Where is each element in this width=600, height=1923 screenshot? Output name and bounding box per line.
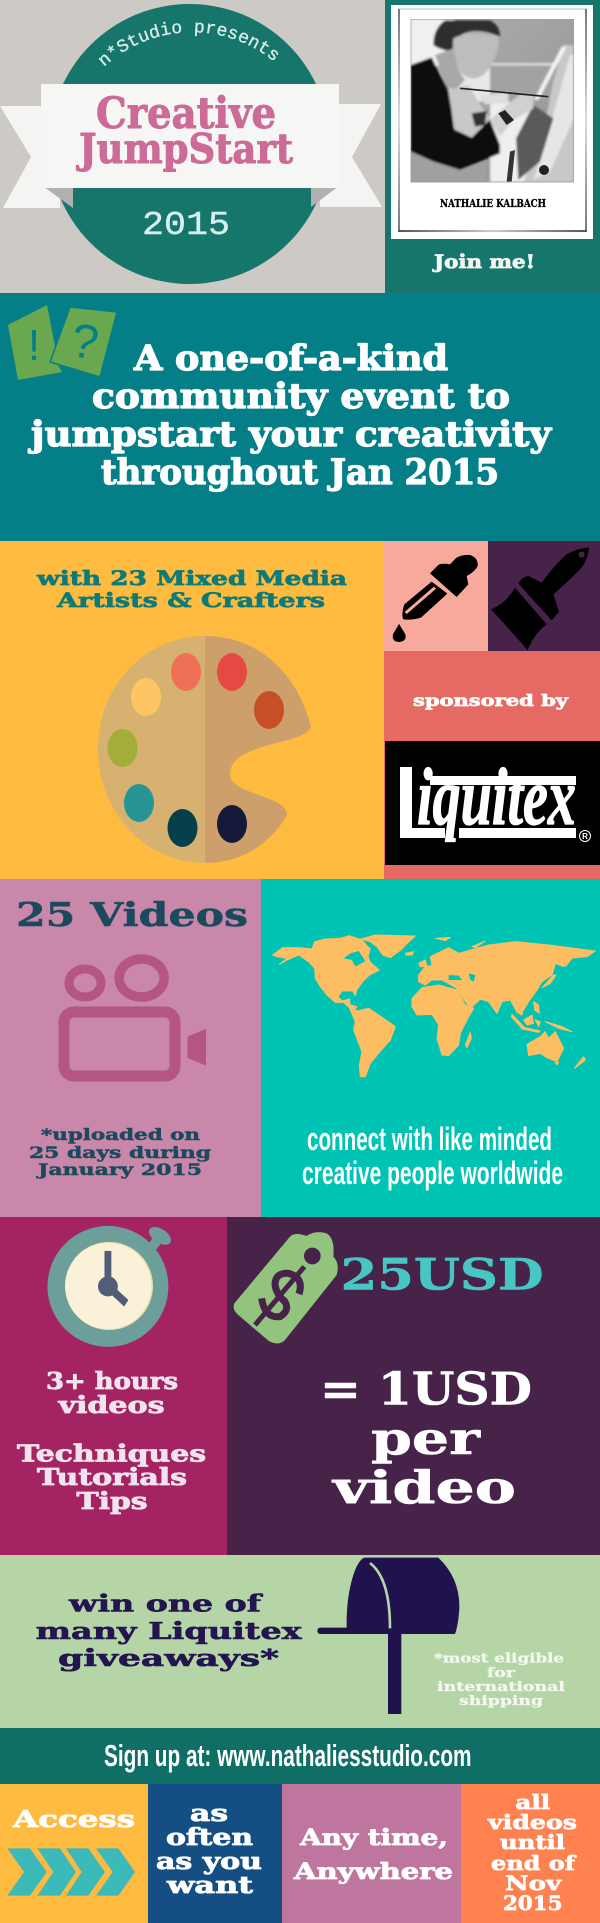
- text: as often as you want: as: [190, 1800, 228, 1827]
- icon: paint palette: [98, 636, 311, 863]
- note: upload schedule: *uploaded on: [41, 1125, 200, 1144]
- heading: 25 Videos: 25 Videos: [16, 895, 248, 934]
- heading: 23 mixed media artists: Artists & Crafters: [56, 588, 325, 612]
- title: Creative JumpStart: [76, 89, 293, 173]
- panel: sponsor: [384, 651, 600, 879]
- icon: chevron arrows: [7, 1848, 135, 1896]
- text: all videos until end of Nov 2015: Nov: [505, 1871, 563, 1895]
- text: Join me!: Join me!: [432, 251, 535, 273]
- note: upload schedule: 25 days during: [29, 1143, 211, 1162]
- text: 1USD per video: per: [371, 1412, 482, 1465]
- text: 1USD per video: video: [332, 1461, 516, 1514]
- headline text: throughout Jan 2015: [101, 452, 499, 493]
- text: all videos until end of Nov 2015: [487, 1790, 577, 1915]
- text: video hours and topics: Tutorials: [37, 1464, 187, 1491]
- icon: exclamation and question cards: ?: [67, 314, 102, 371]
- text: any time anywhere: Any time,: [299, 1825, 448, 1851]
- caption: Nathalie Kalbach: NATHALIE KALBACH: [440, 197, 546, 210]
- text: video hours and topics: Techniques: [17, 1440, 206, 1468]
- icon: video camera: [64, 959, 206, 1076]
- panel: video length: [0, 1217, 227, 1555]
- headline text: jumpstart your creativity: [28, 414, 553, 455]
- icon: stopwatch: [47, 1223, 173, 1347]
- panel: availability: [461, 1784, 600, 1923]
- panel: artist portrait: [385, 0, 600, 293]
- title: Creative JumpStart: Creative: [96, 89, 276, 139]
- text: video hours and topics: Tips: [76, 1488, 148, 1515]
- logo: Liquitex: R: [582, 832, 588, 841]
- text: 25USD: 25USD: [341, 1251, 544, 1301]
- note: international shipping: shipping: [459, 1694, 543, 1709]
- text: 1USD per video: [320, 1363, 532, 1514]
- panel: giveaways: [0, 1555, 600, 1728]
- icon: exclamation and question cards: [8, 305, 117, 380]
- text: video hours and topics: videos: [57, 1392, 164, 1419]
- text: as often as you want: want: [166, 1872, 254, 1899]
- icon: dropper: [393, 555, 478, 642]
- badge circle: [50, 4, 330, 284]
- text: all videos until end of Nov 2015: end of: [491, 1851, 577, 1875]
- icon: price tag: [234, 1232, 338, 1344]
- headline text: [28, 338, 553, 493]
- text: as often as you want: [156, 1800, 262, 1899]
- text: video hours and topics: 3+ hours: [46, 1368, 178, 1395]
- text: all videos until end of Nov 2015: until: [500, 1830, 565, 1854]
- note: upload schedule: January 2015: [35, 1160, 202, 1179]
- panel: artists and palette: [0, 541, 384, 879]
- world map: [273, 935, 595, 1077]
- logo: Liquitex: [385, 741, 600, 865]
- text: any time anywhere: [293, 1825, 453, 1885]
- panel: any time anywhere: [282, 1784, 461, 1923]
- text: sponsored by: sponsored by: [413, 691, 569, 710]
- panel: brush tile: [488, 541, 600, 651]
- text: as often as you want: as you: [156, 1848, 262, 1875]
- note: international shipping: for: [487, 1666, 515, 1681]
- panel: as often as you want: [148, 1784, 282, 1923]
- text: video hours and topics: [17, 1368, 206, 1515]
- text: Access: Access: [12, 1806, 135, 1833]
- panel: 25 videos: [0, 879, 261, 1217]
- text: 1USD per video: = 1USD: [320, 1363, 532, 1416]
- text: win giveaways: giveaways*: [58, 1645, 279, 1672]
- title: Creative JumpStart: JumpStart: [76, 125, 293, 173]
- panel: price: [227, 1217, 600, 1555]
- text: win giveaways: many Liquitex: [36, 1618, 302, 1645]
- text: connect with like minded: [302, 1121, 563, 1191]
- panel: access: [0, 1784, 148, 1923]
- icon: exclamation and question cards: !: [28, 321, 40, 370]
- note: international shipping: [434, 1652, 565, 1709]
- portrait photo: [411, 19, 574, 182]
- text: all videos until end of Nov 2015: videos: [487, 1810, 577, 1834]
- heading: 23 mixed media artists: with 23 Mixed Media: [36, 566, 347, 590]
- panel: logo badge: [0, 0, 385, 293]
- text: all videos until end of Nov 2015: 2015: [503, 1891, 562, 1915]
- panel: sign up bar: [0, 1728, 600, 1784]
- headline text: community event to: [92, 376, 510, 417]
- panel: worldwide community: [261, 879, 600, 1217]
- note: upload schedule: [29, 1125, 211, 1179]
- heading: 23 mixed media artists: [36, 566, 347, 612]
- text: any time anywhere: Anywhere: [293, 1859, 453, 1885]
- polaroid frame: [391, 5, 593, 239]
- panel: dropper tile: [384, 541, 488, 651]
- text: as often as you want: often: [166, 1824, 253, 1851]
- ribbon banner: [0, 84, 382, 208]
- icon: paint brush: [491, 548, 589, 650]
- headline text: A one-of-a-kind: [133, 338, 448, 379]
- note: international shipping: international: [437, 1680, 565, 1695]
- year 2015: 2015: [142, 207, 230, 244]
- text: win giveaways: [36, 1590, 302, 1672]
- note: international shipping: *most eligible: [434, 1652, 564, 1666]
- text: win giveaways: win one of: [68, 1590, 264, 1618]
- icon: mailbox: [317, 1558, 459, 1714]
- curved text: n*Studio presents: n*Studio presents: [98, 22, 278, 66]
- panel: headline: [0, 293, 600, 541]
- text: all videos until end of Nov 2015: all: [516, 1790, 550, 1814]
